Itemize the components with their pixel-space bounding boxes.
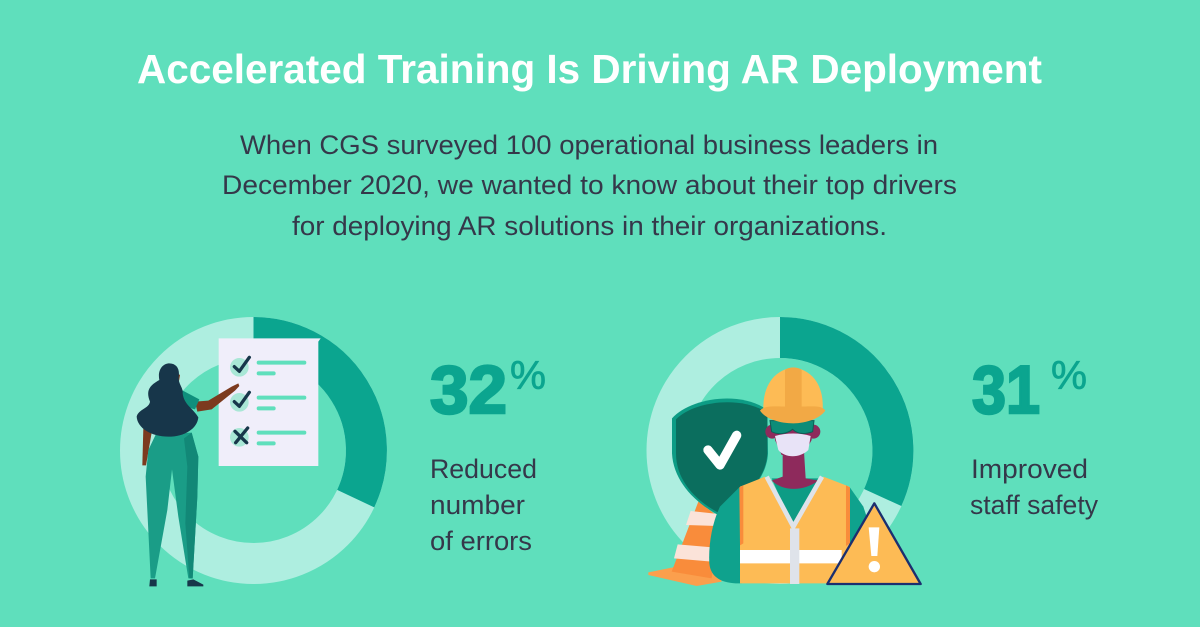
intro paragraph: December 2020, we wanted to know about their top drivers xyxy=(222,170,957,200)
stat: 32%: 32 xyxy=(430,352,507,428)
label: reduced number of errors: Reduced xyxy=(430,454,537,484)
stat: 32%: % xyxy=(510,354,546,398)
illustration: safety worker xyxy=(648,367,921,586)
donut chart: 31% xyxy=(667,338,893,564)
label: improved staff safety: staff safety xyxy=(970,490,1098,520)
label: improved staff safety: Improved xyxy=(971,454,1088,484)
label: improved staff safety xyxy=(970,454,1098,520)
hard hat xyxy=(760,367,825,423)
checklist paper xyxy=(219,338,321,466)
shield with check xyxy=(672,399,768,515)
stat: 31%: 31 xyxy=(972,352,1040,428)
panel: reduced errors xyxy=(137,338,546,586)
intro paragraph xyxy=(222,130,957,241)
woman figure xyxy=(137,363,239,586)
illustration: woman pointing at checklist xyxy=(137,338,321,586)
traffic cone xyxy=(648,502,722,586)
label: reduced number of errors: number xyxy=(430,490,525,520)
donut chart: 32% xyxy=(140,338,366,564)
stat: 32% xyxy=(430,352,546,428)
title: Accelerated Training Is Driving AR Deployment xyxy=(137,46,1042,92)
stat: 31% xyxy=(972,352,1087,428)
label: reduced number of errors: of errors xyxy=(430,526,532,556)
stat: 31%: % xyxy=(1051,354,1087,398)
intro paragraph: for deploying AR solutions in their organizations. xyxy=(292,211,887,241)
intro paragraph: When CGS surveyed 100 operational business leaders in xyxy=(240,130,938,160)
worker figure xyxy=(709,421,870,584)
panel: improved staff safety xyxy=(648,338,1098,586)
label: reduced number of errors xyxy=(430,454,537,556)
warning sign xyxy=(827,503,921,584)
